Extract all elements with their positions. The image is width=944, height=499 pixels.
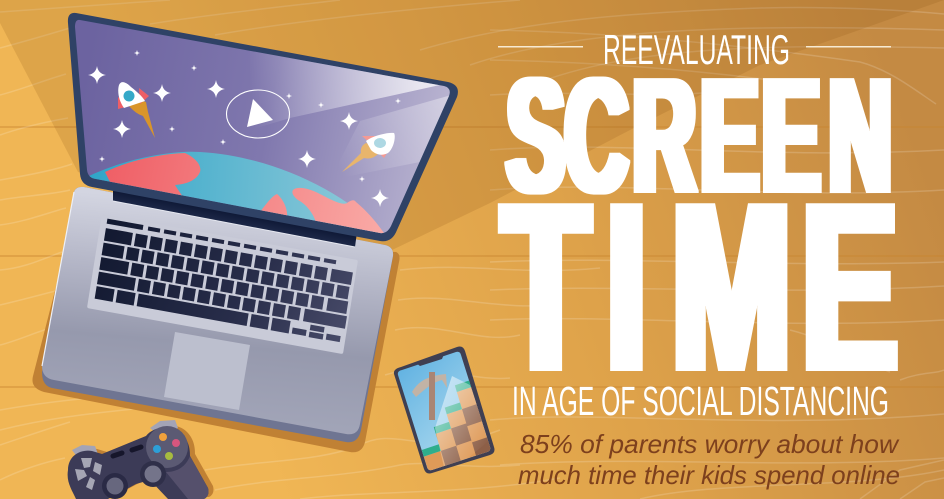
continent left: [105, 153, 200, 199]
hinge: [113, 186, 357, 247]
title block: [498, 26, 897, 424]
keyboard: [87, 214, 358, 354]
title line: screen: SCREEN: [507, 43, 892, 227]
stars: [88, 50, 401, 207]
title line: reevaluating: REEVALUATING: [603, 26, 790, 73]
continent middle: [261, 194, 288, 216]
laptop screen: [75, 20, 450, 234]
phone glare: [435, 376, 486, 466]
subtitle statistic: 85% of parents worry about how: [520, 429, 900, 459]
subtitle statistic: much time their kids spend online: [518, 460, 900, 490]
subtitle statistic: [518, 429, 900, 490]
cast shadow of laptop lid on desk: [0, 0, 944, 250]
title rule left: [498, 46, 583, 48]
phone notch: [416, 354, 444, 366]
play button: [226, 90, 290, 138]
screen glare upper: [260, 53, 440, 124]
action buttons: [153, 433, 180, 460]
game controller: [68, 420, 214, 499]
laptop shadow: [32, 240, 400, 452]
planet: [85, 152, 388, 238]
laptop lid bezel: [68, 13, 458, 241]
smartphone: [394, 346, 494, 474]
game blocks: [422, 380, 490, 470]
laptop: [32, 10, 470, 452]
title rule right: [806, 46, 891, 48]
d-pad: [75, 458, 102, 490]
analog sticks: [102, 461, 166, 499]
trackpad: [164, 332, 250, 410]
rocket right: [342, 133, 395, 172]
shoulder buttons: [72, 420, 178, 458]
controller shadow: [73, 425, 214, 497]
screen glare lower: [352, 96, 449, 170]
laptop base: [42, 187, 393, 442]
title line: time: TIME: [502, 153, 897, 420]
rocket left: [118, 82, 155, 138]
phone screen: [398, 352, 490, 470]
controller body: [68, 427, 208, 499]
continent right: [292, 188, 386, 236]
vents: [113, 447, 141, 456]
pickaxe: [412, 372, 447, 420]
